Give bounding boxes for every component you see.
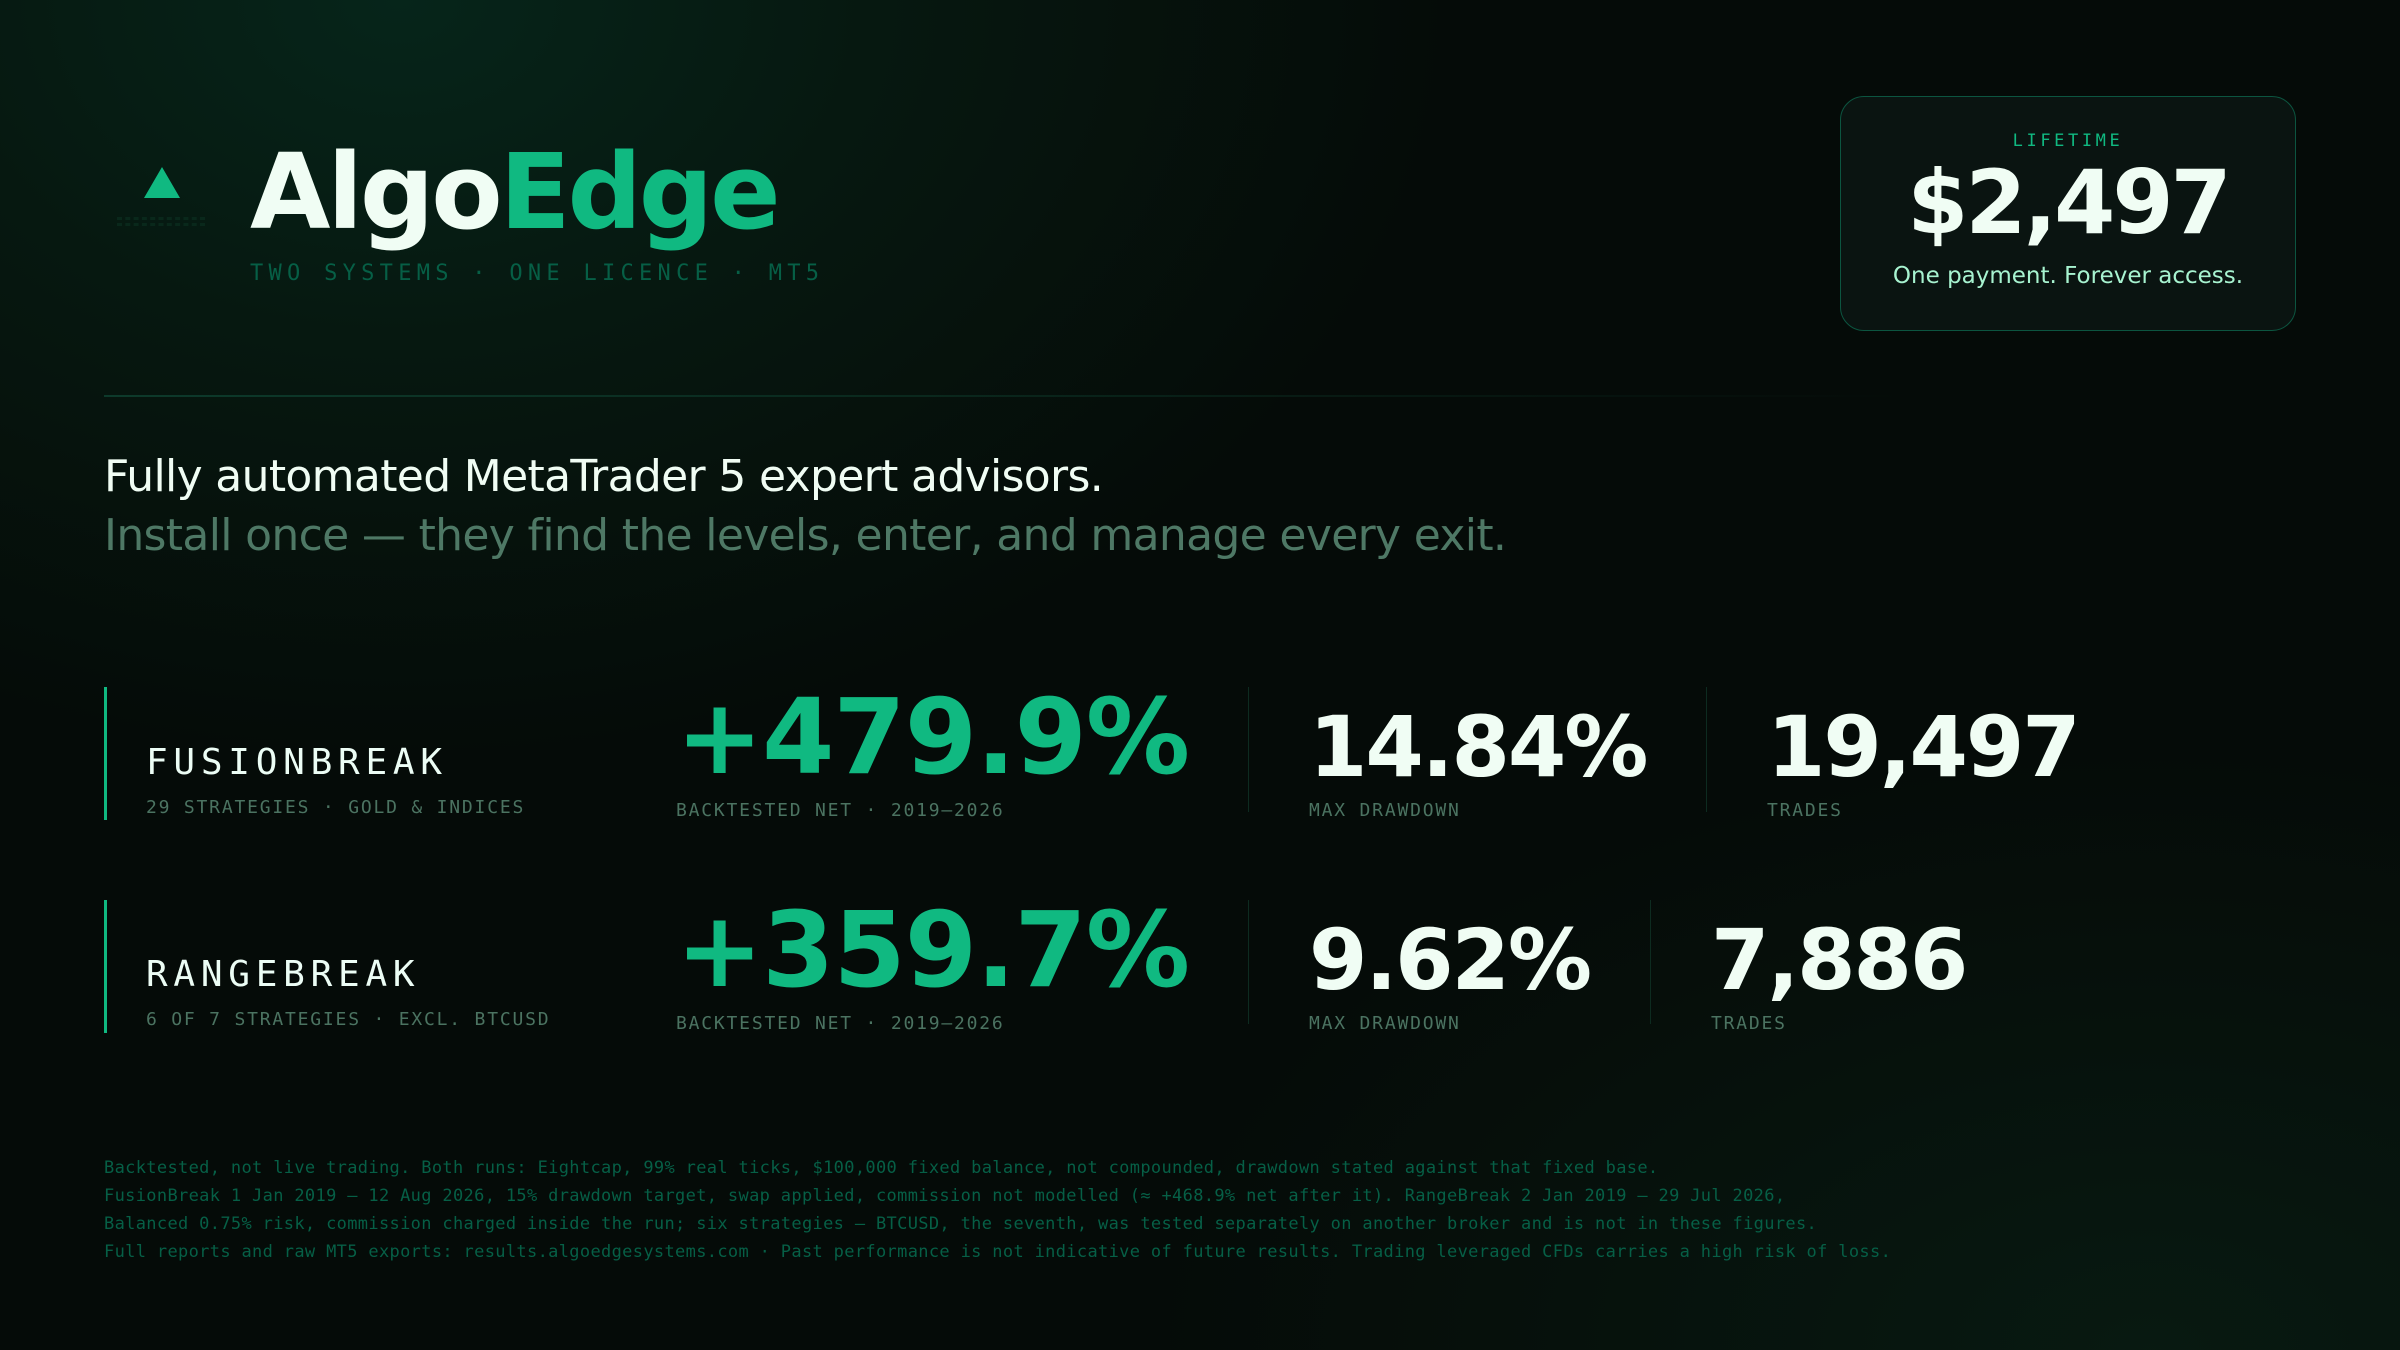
system name (146, 742, 525, 818)
panel: RangeBreak row (104, 889, 1966, 1034)
trades: TRADES (1711, 1013, 1787, 1034)
footnote disclaimer: Backtested, not live trading. Both runs: Eightcap, 99% real ticks, $100,000 fixed balance, not compounded, drawdown stated against that fixed base. (104, 1158, 1659, 1178)
footnote disclaimer: Full reports and raw MT5 exports: results.algoedgesystems.com · Past performance is not indicative of future results. Trading leveraged CFDs carries a high risk of loss. (104, 1242, 1891, 1262)
net return: BACKTESTED NET · 2019–2026 (676, 1013, 1005, 1034)
system name: 29 STRATEGIES · GOLD & INDICES (146, 797, 525, 818)
max drawdown: MAX DRAWDOWN (1309, 1013, 1461, 1034)
lifetime label: LIFETIME (2013, 131, 2123, 151)
footnote disclaimer (104, 1158, 1891, 1262)
net return: BACKTESTED NET · 2019–2026 (676, 800, 1005, 821)
trades: TRADES (1767, 800, 1843, 821)
intro text (104, 451, 1506, 561)
intro text: Fully automated MetaTrader 5 expert advisors. (104, 451, 1103, 502)
tagline: TWO SYSTEMS · ONE LICENCE · MT5 (250, 261, 824, 286)
system name (146, 954, 550, 1030)
panel: FusionBreak row (104, 676, 2079, 821)
icon: logo triangle with dashes (117, 167, 205, 226)
max drawdown: 14.84% (1309, 698, 1646, 796)
max drawdown: 9.62% (1309, 911, 1590, 1009)
panel: lifetime price (1840, 96, 2296, 331)
net return: +359.7% (676, 889, 1189, 1011)
max drawdown: MAX DRAWDOWN (1309, 800, 1461, 821)
trades: 7,886 (1711, 911, 1966, 1009)
trades: 19,497 (1767, 698, 2079, 796)
footnote disclaimer: Balanced 0.75% risk, commission charged inside the run; six strategies – BTCUSD, the seventh, was tested separately on another broker and is not in these figures. (104, 1214, 1817, 1234)
title: AlgoEdge: AlgoEdge (250, 131, 778, 253)
accent bar (104, 900, 107, 1033)
accent bar (104, 687, 107, 820)
net return: +479.9% (676, 676, 1189, 798)
footnote disclaimer: FusionBreak 1 Jan 2019 – 12 Aug 2026, 15% drawdown target, swap applied, commission not modelled (≈ +468.9% net after it). RangeBreak 2 Jan 2019 – 29 Jul 2026, (104, 1186, 1785, 1206)
system name: RANGEBREAK (146, 954, 420, 995)
price note: One payment. Forever access. (1893, 263, 2243, 289)
system name: FUSIONBREAK (146, 742, 448, 783)
system name: 6 OF 7 STRATEGIES · EXCL. BTCUSD (146, 1009, 550, 1030)
price: $2,497 (1907, 151, 2229, 254)
intro text: Install once — they find the levels, enter, and manage every exit. (104, 510, 1506, 561)
